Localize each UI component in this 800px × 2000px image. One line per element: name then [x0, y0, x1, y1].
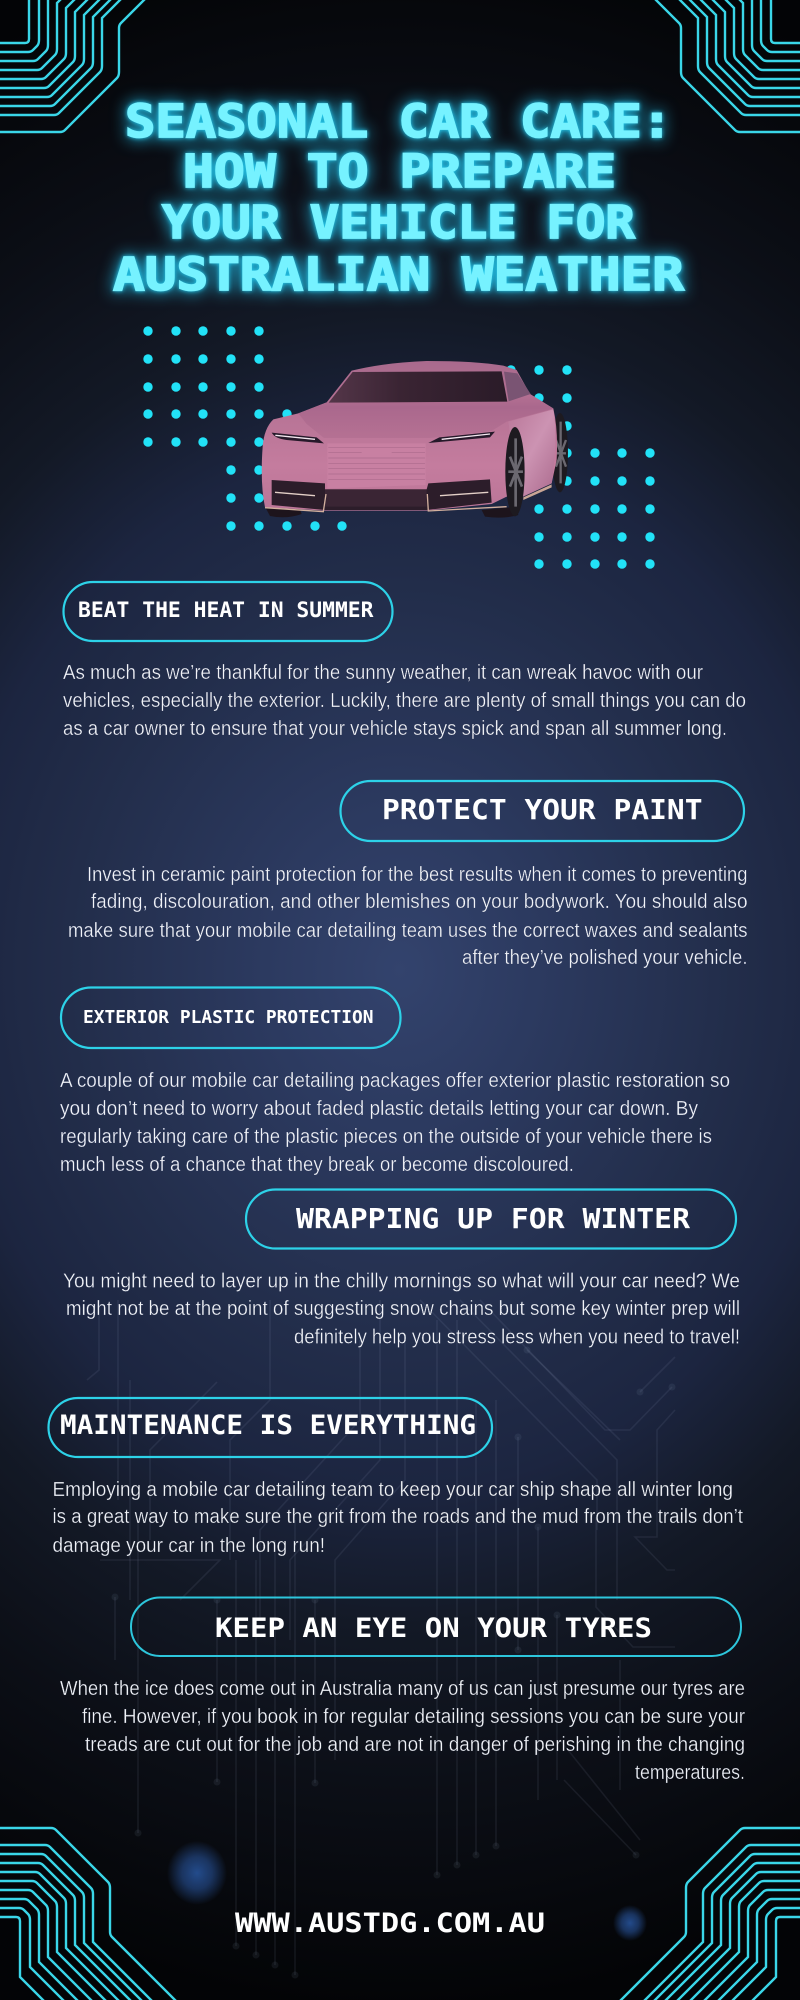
panel: protect your paint [68, 781, 748, 969]
pill heading: BEAT THE HEAT IN SUMMER [78, 598, 374, 622]
pill heading [131, 1598, 741, 1656]
circuit node dots [112, 1346, 676, 1978]
body text: fading, discolouration, and other blemishes on your bodywork. You should also [91, 891, 748, 913]
corner circuit bottom right [611, 1828, 800, 2000]
body text: Invest in ceramic paint protection for the best results when it comes to preventing [87, 864, 748, 886]
pill heading [340, 781, 744, 841]
body text: regularly taking care of the plastic pieces on the outside of your vehicle there is [60, 1126, 712, 1148]
panel: maintenance is everything [48, 1398, 743, 1557]
dot grid right [506, 365, 655, 569]
corner circuit top left [0, 0, 194, 132]
body text [60, 1070, 730, 1176]
body text: is a great way to make sure the grit from the roads and the mud from the trails don’t [52, 1506, 743, 1528]
body text: make sure that your mobile car detailing team uses the correct waxes and sealants [68, 920, 748, 942]
body text: vehicles, especially the exterior. Luckily, there are plenty of small things you can do [63, 690, 746, 712]
body text: treads are cut out for the job and are not in danger of perishing in the changing [85, 1734, 745, 1756]
panel: beat the heat in summer [63, 582, 746, 740]
panel: keep an eye on your tyres [60, 1598, 745, 1784]
corner circuit top right [606, 0, 800, 132]
panel: exterior plastic protection [60, 988, 730, 1176]
pill heading: PROTECT YOUR PAINT [382, 793, 702, 826]
dot grid left [143, 326, 347, 531]
title: YOUR VEHICLE FOR [162, 196, 636, 249]
blue glow right [613, 1905, 647, 1941]
pill heading [61, 988, 400, 1048]
pill heading: EXTERIOR PLASTIC PROTECTION [83, 1008, 374, 1028]
body text: You might need to layer up in the chilly mornings so what will your car need? We [63, 1270, 740, 1292]
body text: When the ice does come out in Australia many of us can just presume our tyres are [60, 1678, 745, 1700]
body text: as a car owner to ensure that your vehicle stays spick and span all summer long. [63, 718, 727, 740]
car illustration [262, 361, 568, 518]
title: SEASONAL CAR CARE: [125, 95, 672, 148]
body text: much less of a chance that they break or become discoloured. [60, 1154, 574, 1176]
circuit board background pattern [87, 1300, 675, 1975]
body text: you don’t need to worry about faded plastic details letting your car down. By [60, 1098, 698, 1120]
title [113, 95, 685, 301]
footer url: WWW.AUSTDG.COM.AU [235, 1908, 545, 1939]
corner circuit bottom left [0, 1828, 185, 2000]
body text: after they’ve polished your vehicle. [462, 947, 748, 969]
body text: might not be at the point of suggesting snow chains but some key winter prep will [66, 1298, 740, 1320]
body text [63, 1270, 740, 1348]
title: AUSTRALIAN WEATHER [113, 248, 685, 301]
body text: fine. However, if you book in for regular detailing sessions you can be sure your [82, 1706, 745, 1728]
body text: definitely help you stress less when you need to travel! [294, 1326, 740, 1348]
body text: temperatures. [635, 1762, 745, 1784]
body text [63, 662, 746, 740]
body text: A couple of our mobile car detailing packages offer exterior plastic restoration so [60, 1070, 730, 1092]
body text [68, 864, 748, 969]
body text [60, 1678, 745, 1784]
body text [52, 1479, 743, 1557]
pill heading: WRAPPING UP FOR WINTER [296, 1202, 690, 1235]
panel: wrapping up for winter [63, 1190, 740, 1348]
pill heading [48, 1398, 492, 1457]
body text: damage your car in the long run! [52, 1535, 325, 1557]
title: HOW TO PREPARE [183, 145, 616, 198]
body text: Employing a mobile car detailing team to keep your car ship shape all winter long [52, 1479, 733, 1501]
blue glow left [167, 1841, 227, 1905]
pill heading [64, 582, 392, 641]
pill heading: MAINTENANCE IS EVERYTHING [60, 1410, 476, 1441]
pill heading [246, 1190, 736, 1248]
pill heading: KEEP AN EYE ON YOUR TYRES [215, 1613, 652, 1644]
body text: As much as we’re thankful for the sunny weather, it can wreak havoc with our [63, 662, 703, 684]
